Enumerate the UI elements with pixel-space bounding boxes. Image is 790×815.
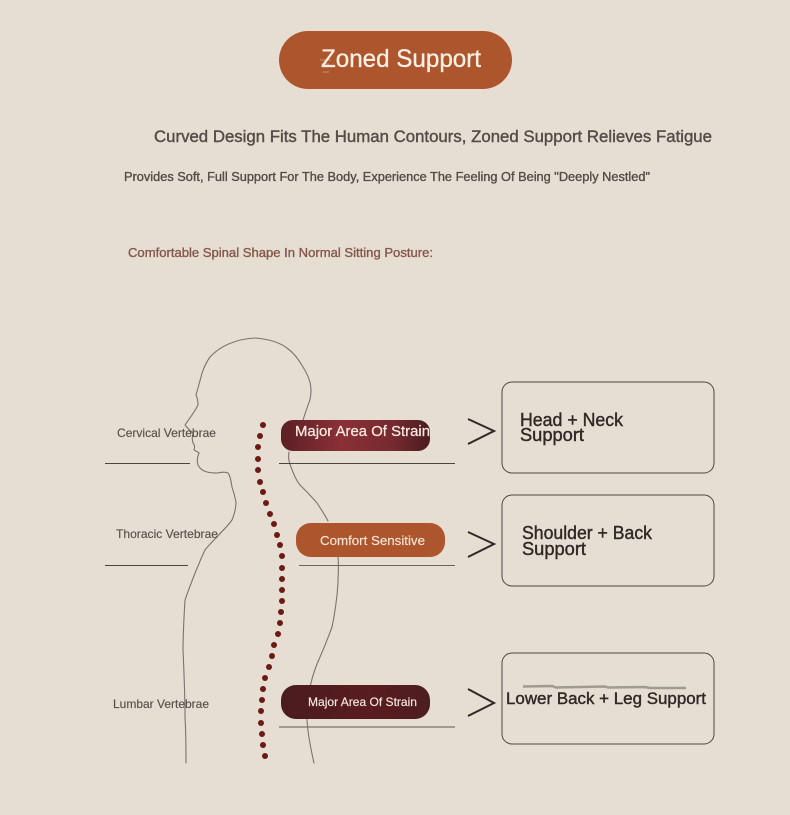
- subheading: Provides Soft, Full Support For The Body, Experience The Feeling Of Being "Deeply Nestled": [124, 170, 650, 184]
- row 2: comfort sensitive: [296, 495, 714, 586]
- row 1: major area of strain: [279, 382, 714, 473]
- label: cervical vertebrae: Cervical Vertebrae: [117, 426, 216, 440]
- section label: Comfortable Spinal Shape In Normal Sitting Posture:: [128, 246, 433, 260]
- title badge: [279, 31, 512, 89]
- label: thoracic vertebrae: Thoracic Vertebrae: [116, 527, 218, 541]
- arrow: [468, 689, 494, 716]
- pill: major area of strain: Major Area Of Strain: [295, 424, 430, 440]
- pill: comfort sensitive: [296, 523, 445, 557]
- spine dots: [255, 422, 285, 759]
- label: lumbar vertebrae: Lumbar Vertebrae: [113, 697, 209, 711]
- box: shoulder and back support: Shoulder + Back: [522, 523, 653, 543]
- box: head and neck support: [502, 382, 714, 473]
- box: head and neck support: Support: [520, 425, 584, 445]
- arrow: [468, 419, 494, 444]
- arrow: [468, 532, 494, 557]
- label: cervical vertebrae: [105, 426, 216, 464]
- body outline: [183, 338, 338, 763]
- box: shoulder and back support: [502, 495, 714, 586]
- box: head and neck support: Head + Neck: [520, 410, 624, 430]
- row 3: major area of strain: [279, 653, 714, 744]
- pill: major area of strain: [281, 685, 430, 719]
- title badge: Zoned Support: [321, 45, 481, 73]
- label: thoracic vertebrae: [105, 527, 218, 566]
- box: lower back and leg support: [502, 653, 714, 744]
- pill: comfort sensitive: Comfort Sensitive: [320, 534, 425, 548]
- box: lower back and leg support: Lower Back + Leg Support: [506, 690, 706, 708]
- pill: major area of strain: Major Area Of Strain: [308, 695, 417, 709]
- heading: Curved Design Fits The Human Contours, Zoned Support Relieves Fatigue: [154, 128, 712, 146]
- pill: major area of strain: [281, 420, 430, 451]
- box: shoulder and back support: Support: [522, 539, 586, 559]
